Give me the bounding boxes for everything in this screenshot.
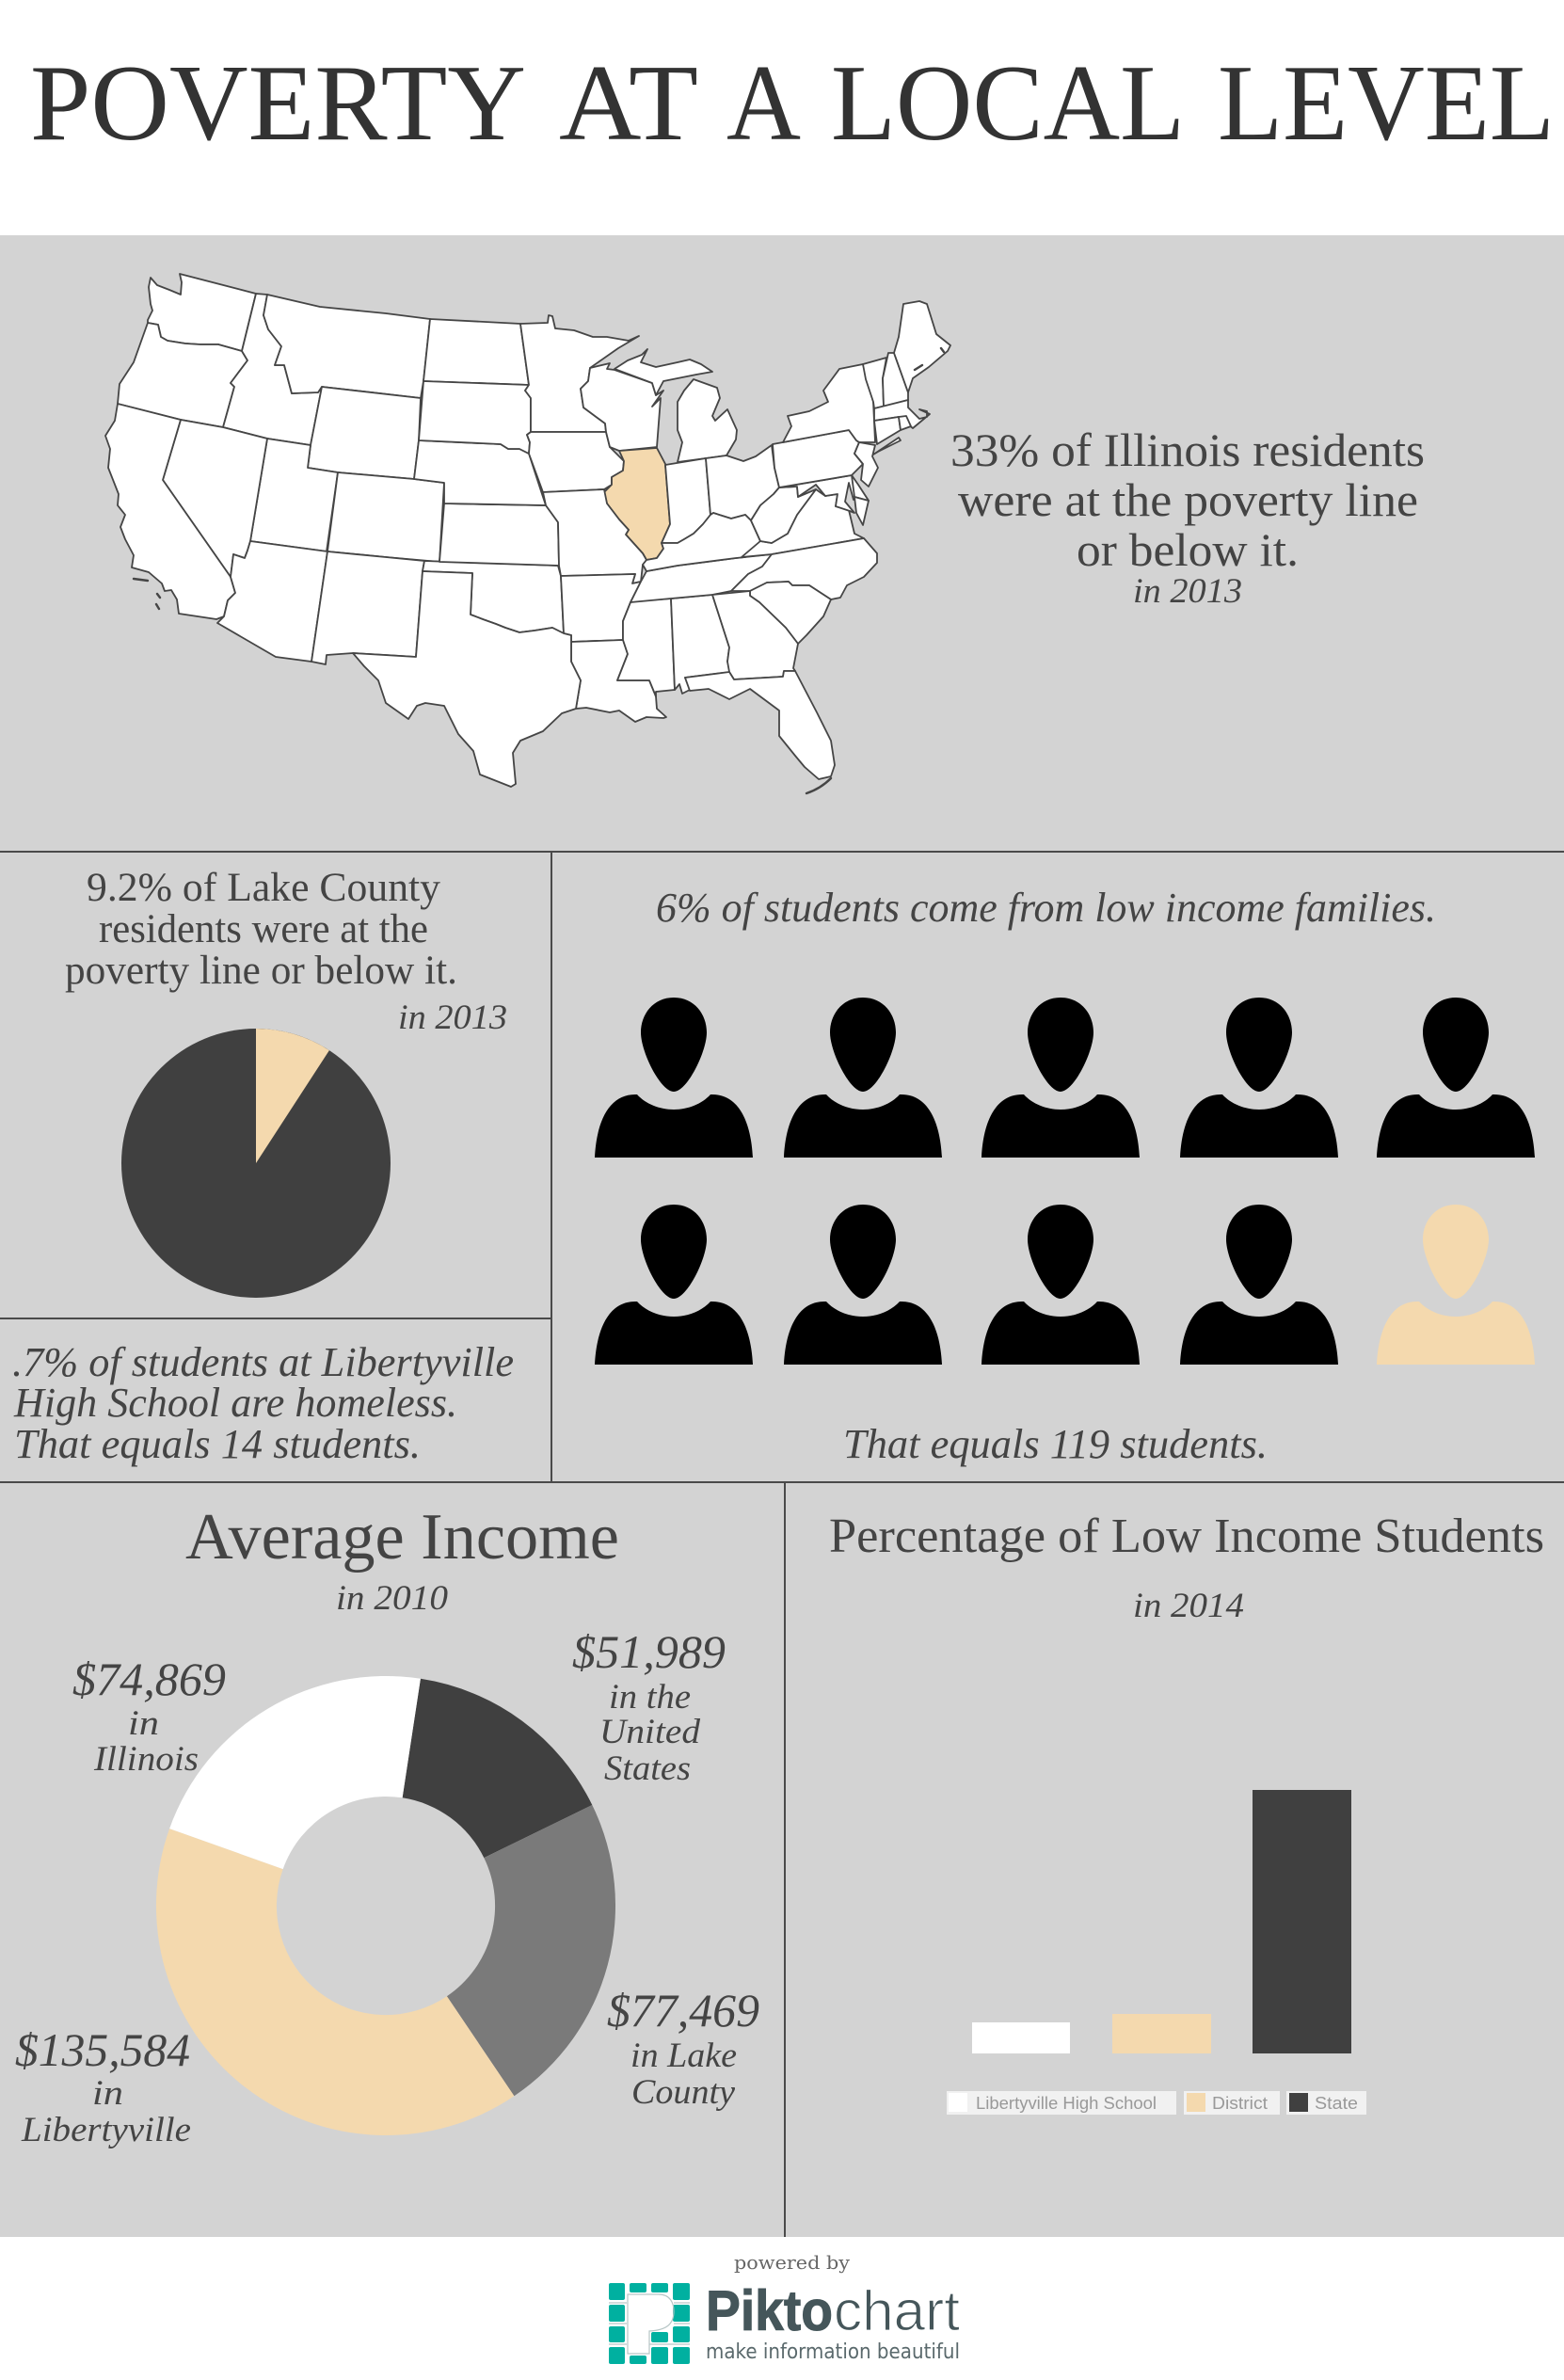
icon: Piktochart logo bbox=[609, 2283, 690, 2364]
label: Illinois income: $74,869 bbox=[72, 1653, 226, 1705]
label: Libertyville income: Libertyville bbox=[21, 2111, 191, 2149]
icon: person 3 bbox=[981, 998, 1140, 1158]
Illinois poverty statistic text bbox=[950, 423, 1425, 611]
label: Lake County income bbox=[607, 1984, 759, 2112]
icon: person 7 bbox=[784, 1205, 942, 1365]
map of the United States with Illinois highlighted bbox=[105, 274, 950, 793]
label: United States income: States bbox=[604, 1749, 691, 1788]
bar chart bbox=[972, 1790, 1351, 2053]
label: Lake County income: County bbox=[631, 2073, 736, 2112]
label: Libertyville income bbox=[15, 2023, 191, 2149]
label: United States income: $51,989 bbox=[572, 1625, 726, 1678]
icon: person 4 bbox=[1180, 998, 1338, 1158]
panel: low income students bbox=[595, 885, 1535, 1467]
icon: person 1 bbox=[595, 998, 753, 1158]
panel: homeless students text: That equals 14 students. bbox=[14, 1421, 421, 1467]
Lake County statistic text: residents were at the bbox=[99, 907, 428, 951]
icon: person 2 bbox=[784, 998, 942, 1158]
title bbox=[30, 43, 1555, 164]
student count text: That equals 119 students. bbox=[843, 1421, 1268, 1467]
label: Libertyville income: $135,584 bbox=[15, 2023, 190, 2076]
panel: Lake County bbox=[65, 866, 507, 1298]
Lake County statistic text bbox=[65, 866, 507, 1037]
title: A bbox=[726, 43, 801, 164]
heading: percentage of low income students: Percentage of Low Income Students bbox=[829, 1509, 1544, 1563]
footer: powered by Piktochart bbox=[609, 2251, 960, 2364]
icon: person 10 highlighted bbox=[1377, 1205, 1535, 1365]
title: LOCAL bbox=[831, 43, 1185, 164]
Illinois poverty statistic text: were at the poverty line bbox=[958, 473, 1418, 526]
panel: homeless students text: High School are homeless. bbox=[13, 1380, 457, 1426]
panel: Illinois map and statistic bbox=[105, 274, 1425, 793]
label: Lake County income: in Lake bbox=[630, 2037, 737, 2075]
label: Illinois income: in bbox=[128, 1704, 159, 1743]
donut chart bbox=[156, 1676, 615, 2135]
panel: average income bbox=[15, 1501, 759, 2149]
Illinois poverty statistic text: 33% of Illinois residents bbox=[950, 423, 1425, 476]
label: Illinois income: Illinois bbox=[93, 1740, 199, 1779]
chart legend bbox=[947, 2091, 1366, 2115]
tagline: make information beautiful bbox=[706, 2340, 960, 2364]
chart legend: District bbox=[1212, 2094, 1268, 2113]
label: United States income: United bbox=[599, 1713, 701, 1751]
label: United States income bbox=[572, 1625, 726, 1788]
powered by text: powered by bbox=[734, 2251, 851, 2274]
heading: average income: Average Income bbox=[185, 1501, 619, 1573]
icon: person 5 bbox=[1377, 998, 1535, 1158]
title: POVERTY bbox=[30, 43, 526, 164]
pie chart: 9.2 percent bbox=[121, 1029, 391, 1298]
title: LEVEL bbox=[1218, 43, 1555, 164]
Lake County statistic text: in 2013 bbox=[398, 998, 507, 1037]
Lake County statistic text: 9.2% of Lake County bbox=[87, 866, 441, 910]
icon: person 8 bbox=[981, 1205, 1140, 1365]
label: Lake County income: $77,469 bbox=[607, 1984, 759, 2037]
Piktochart wordmark: chart bbox=[834, 2279, 960, 2342]
title: AT bbox=[559, 43, 698, 164]
label: United States income: in the bbox=[609, 1678, 691, 1717]
panel: homeless students text bbox=[12, 1339, 514, 1467]
subheading: in 2014: in 2014 bbox=[1133, 1587, 1244, 1625]
label: Illinois income bbox=[72, 1653, 226, 1779]
Piktochart wordmark: Pikto bbox=[706, 2279, 833, 2342]
icon: person 9 bbox=[1180, 1205, 1338, 1365]
label: Libertyville income: in bbox=[92, 2074, 123, 2113]
Piktochart wordmark bbox=[706, 2279, 960, 2342]
panel: percentage of low income students bbox=[829, 1509, 1544, 2115]
subheading: in 2010: in 2010 bbox=[336, 1579, 449, 1618]
Lake County statistic text: poverty line or below it. bbox=[65, 949, 457, 993]
chart legend: State bbox=[1315, 2094, 1358, 2113]
Illinois poverty statistic text: or below it. bbox=[1077, 523, 1299, 576]
panel: homeless students text: .7% of students at Libertyville bbox=[12, 1339, 514, 1385]
low income heading: 6% of students come from low income families. bbox=[656, 885, 1436, 931]
chart legend: Libertyville High School bbox=[976, 2094, 1157, 2113]
Illinois poverty statistic text: in 2013 bbox=[1133, 572, 1242, 611]
icon: person 6 bbox=[595, 1205, 753, 1365]
